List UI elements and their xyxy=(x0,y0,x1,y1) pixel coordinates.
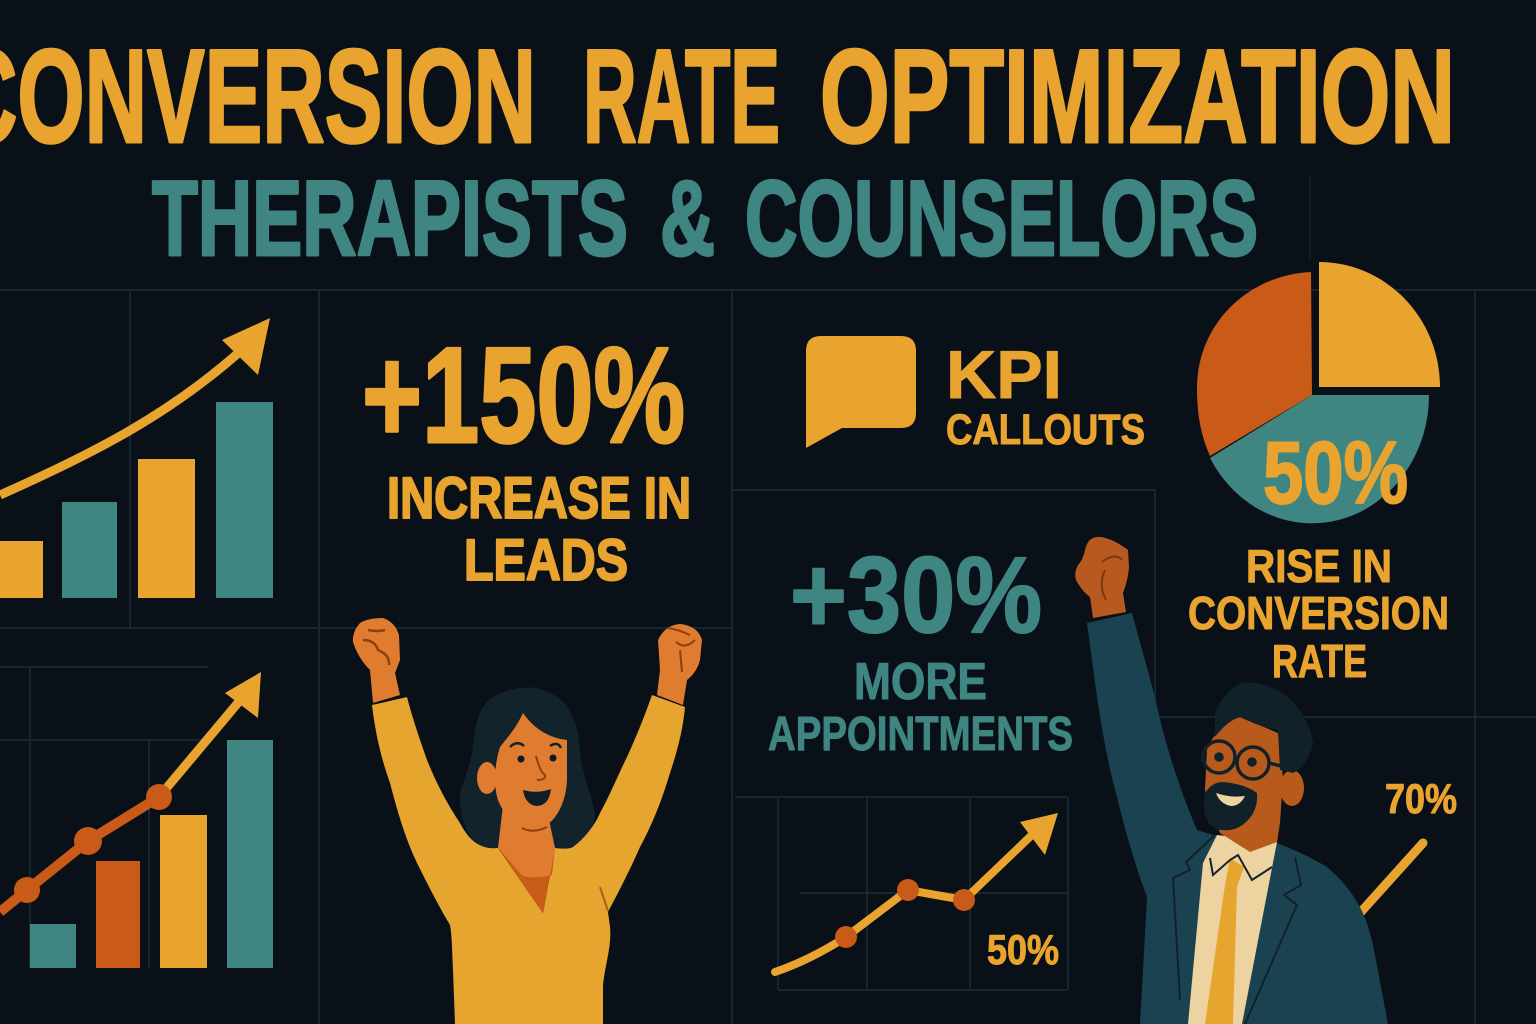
subtitle: THERAPISTS xyxy=(152,158,628,278)
pie chart: 50% xyxy=(1263,423,1408,522)
sweater xyxy=(372,695,685,1024)
partial line and 70% label xyxy=(1360,775,1457,913)
right arm fist xyxy=(657,624,702,705)
stat: +150% increase in leads: INCREASE IN xyxy=(387,466,691,531)
KPI callouts label xyxy=(946,337,1145,454)
subtitle xyxy=(152,158,1258,278)
stat: rise in conversion rate: CONVERSION xyxy=(1188,587,1449,639)
stat: +30% more appointments: MORE xyxy=(854,653,987,711)
facial features xyxy=(510,743,561,831)
small line chart with arrow xyxy=(775,813,1059,973)
sweater fold xyxy=(600,887,608,911)
man celebrating xyxy=(1075,537,1388,1024)
partial line and 70% label: 70% xyxy=(1385,775,1457,822)
subtitle: & xyxy=(660,158,715,278)
combo chart with line and arrow xyxy=(0,672,273,968)
stat: rise in conversion rate: RISE IN xyxy=(1246,540,1392,592)
stat: +30% more appointments xyxy=(768,534,1073,761)
stat: +30% more appointments: APPOINTMENTS xyxy=(768,708,1073,761)
mouth xyxy=(1216,793,1245,806)
subtitle: COUNSELORS xyxy=(745,158,1258,278)
stat: +150% increase in leads: +150% xyxy=(362,319,685,471)
stat: rise in conversion rate xyxy=(1188,540,1449,687)
neck xyxy=(498,805,555,878)
stat: rise in conversion rate: RATE xyxy=(1272,635,1367,687)
woman celebrating xyxy=(353,618,702,1024)
stat: +150% increase in leads: LEADS xyxy=(464,528,628,593)
small line chart with arrow: 50% xyxy=(987,926,1059,973)
stat: +150% increase in leads xyxy=(362,319,691,593)
hair xyxy=(1215,683,1313,773)
title: RATE xyxy=(583,23,780,171)
KPI callouts label: CALLOUTS xyxy=(946,406,1145,454)
left arm fist xyxy=(353,618,400,703)
stat: +30% more appointments: +30% xyxy=(790,534,1042,655)
ear xyxy=(477,762,497,794)
tie xyxy=(1205,858,1244,1024)
jacket xyxy=(1087,613,1388,1024)
pie chart xyxy=(1197,262,1440,523)
bar chart with growth arrow xyxy=(0,318,273,598)
ear xyxy=(1280,770,1304,806)
KPI callouts label: KPI xyxy=(946,337,1062,413)
title xyxy=(0,23,1455,171)
glasses xyxy=(1203,741,1281,779)
beard xyxy=(1204,782,1257,830)
hair xyxy=(460,688,595,849)
face xyxy=(495,713,567,829)
icon: speech bubble xyxy=(806,336,916,448)
neckline xyxy=(498,848,555,913)
shirt xyxy=(1188,835,1277,1024)
fist xyxy=(1075,537,1129,618)
collar and lapels xyxy=(1173,835,1301,1024)
neck and face xyxy=(1205,717,1283,852)
